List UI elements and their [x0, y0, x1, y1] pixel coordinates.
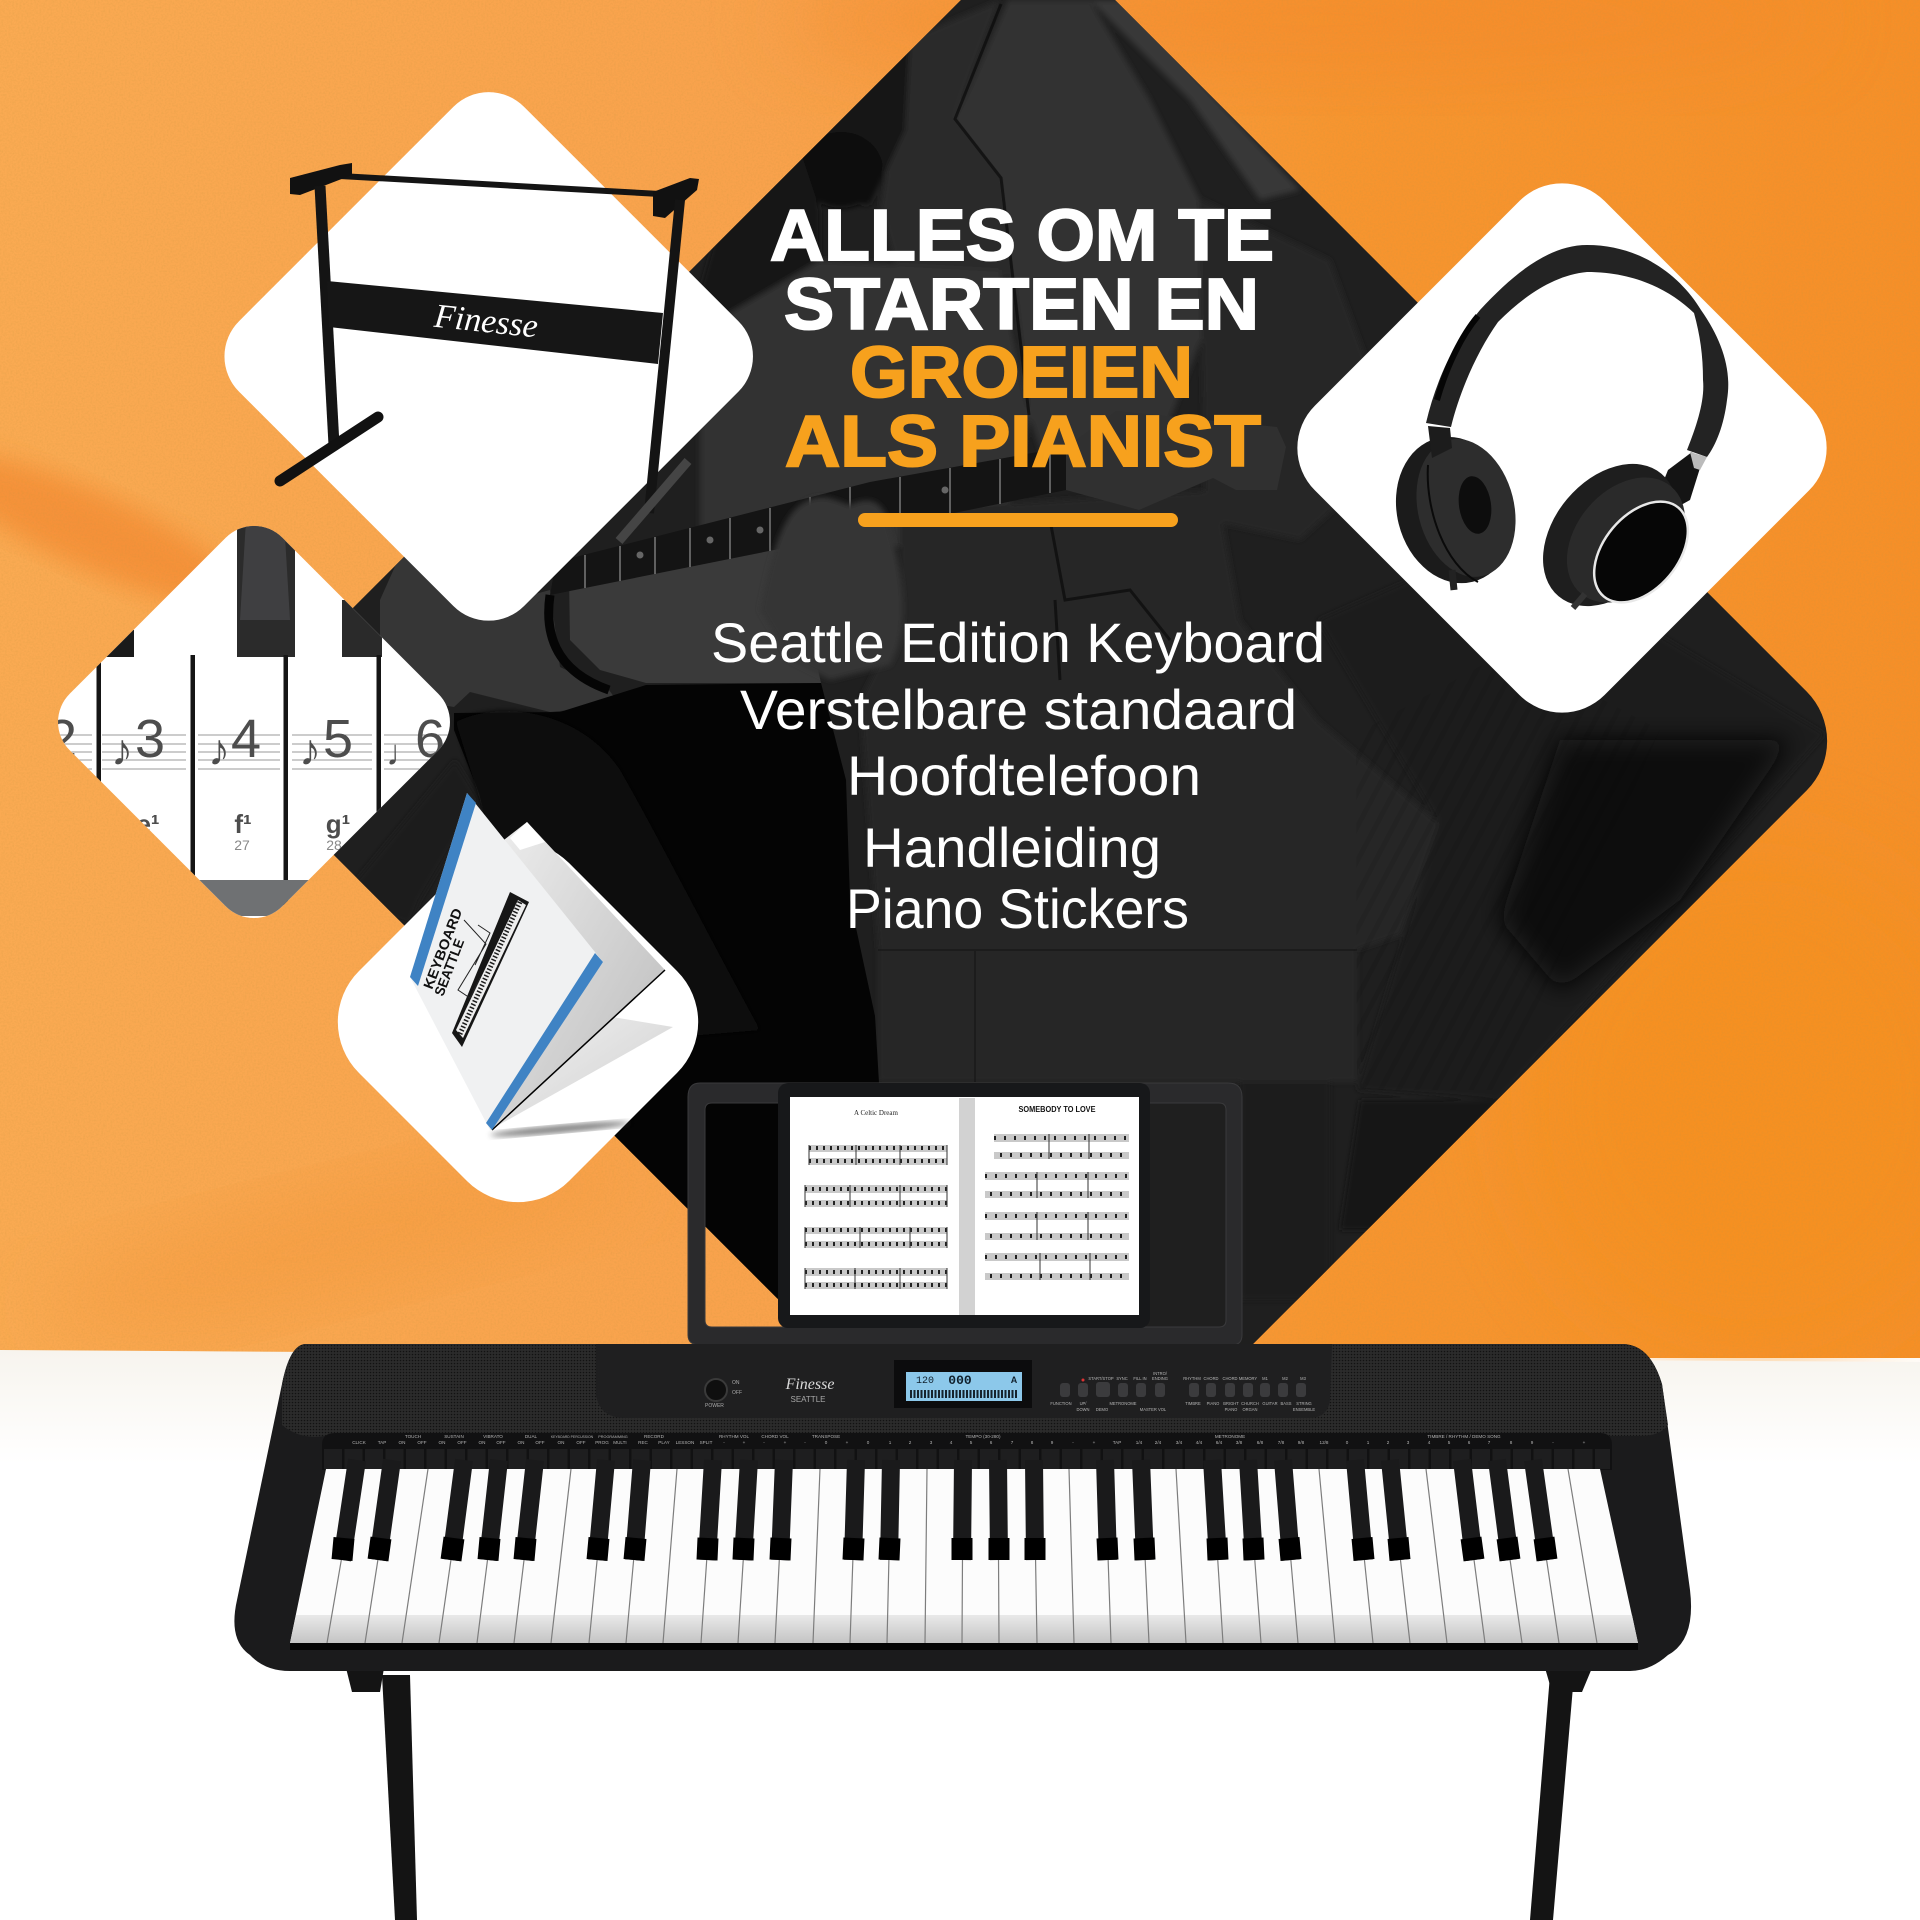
icon: manual booklet: [410, 793, 673, 1139]
rail labels: REC: [638, 1440, 649, 1445]
dark recess on the right: [1500, 740, 1790, 990]
panel button labels: CHORD: [1222, 1376, 1238, 1381]
rail pads: [324, 1449, 1610, 1469]
key numbers and note names: 28: [326, 837, 342, 853]
rail labels: OFF: [457, 1440, 467, 1445]
tablet with sheet music: [778, 1083, 1150, 1328]
panel button labels: FUNCTION: [1050, 1401, 1072, 1406]
title: ALLES OM TE: [770, 196, 1274, 276]
slatted wall: [1356, 650, 1660, 1090]
rail labels: 9: [1051, 1440, 1054, 1445]
rail labels: OFF: [535, 1440, 545, 1445]
key numbers and note names: 2: [47, 709, 77, 769]
rail labels: CHORD VOL: [761, 1434, 789, 1439]
key numbers and note names: ♩: [386, 732, 422, 773]
rail labels: 6/4: [1216, 1440, 1223, 1445]
rail labels: 8: [1510, 1440, 1513, 1445]
keyboard body: [234, 1344, 1691, 1671]
guitarist trousers: [454, 683, 880, 1300]
rail labels: 0: [867, 1440, 870, 1445]
orange wall background: [0, 0, 1920, 1361]
rail labels: 7/8: [1278, 1440, 1285, 1445]
rail labels: 4/4: [1196, 1440, 1203, 1445]
title: [770, 196, 1274, 482]
panel button labels: GUITAR: [1262, 1401, 1278, 1406]
rail labels: METRONOME: [1215, 1434, 1245, 1439]
white diamond: adjustable stand: [204, 71, 774, 641]
shirt below the neck: [569, 545, 821, 683]
rail labels: TAP: [378, 1440, 386, 1445]
manual cover title: KEYBOARD: [420, 906, 465, 991]
key numbers and note names: e¹: [136, 809, 160, 839]
black keys: [342, 1460, 1547, 1560]
rail labels: OFF: [496, 1440, 506, 1445]
keyboard: [234, 1344, 1691, 1671]
rail labels: -: [1552, 1440, 1554, 1445]
panel button labels: CHURCH: [1241, 1401, 1259, 1406]
rail labels: 5: [1448, 1440, 1451, 1445]
panel button labels: INTRO/: [1153, 1371, 1168, 1376]
key bed edge: [290, 1643, 1638, 1650]
list of included items: [711, 611, 1325, 940]
rail labels: TEMPO (30-280): [966, 1434, 1001, 1439]
white floor: [0, 1350, 1920, 1920]
list of included items: Handleiding: [863, 816, 1161, 879]
rail labels: TIMBRE / RHYTHM / DEMO SONG: [1427, 1434, 1501, 1439]
rail labels: 3: [930, 1440, 933, 1445]
rail labels: 1/4: [1136, 1440, 1143, 1445]
pillar seams: [878, 950, 1357, 1082]
rail labels: [352, 1434, 1586, 1445]
panel button labels: PIANO: [1207, 1401, 1219, 1406]
rail labels: RECORD: [644, 1434, 665, 1439]
panel button labels: TIMBRE: [1185, 1401, 1201, 1406]
panel button labels: RHYTHM: [1183, 1376, 1201, 1381]
sheet music page: A Celtic Dream: A Celtic Dream: [854, 1109, 899, 1117]
rail labels: PROGRAMMING: [598, 1435, 628, 1439]
rail labels: CLICK: [352, 1440, 367, 1445]
rail labels: 12/8: [1320, 1440, 1329, 1445]
title: GROEIEN: [850, 333, 1193, 413]
white diamond: manual: [308, 793, 728, 1232]
panel button labels: UP/: [1080, 1401, 1087, 1406]
title underline: [858, 513, 1178, 527]
rail labels: 2/4: [1155, 1440, 1162, 1445]
rail labels: 4: [1428, 1440, 1431, 1445]
rail labels: OFF: [417, 1440, 427, 1445]
key numbers and note names: ♪: [299, 726, 321, 775]
rail labels: 2: [909, 1440, 912, 1445]
white keys: [290, 1469, 1638, 1643]
rail labels: 6: [990, 1440, 993, 1445]
rail labels: ON: [399, 1440, 405, 1445]
rail labels: ON: [558, 1440, 564, 1445]
key numbers and note names: ♪: [111, 726, 133, 775]
black key front tips: [342, 1538, 1547, 1560]
panel button labels: M2: [1282, 1376, 1289, 1381]
rail labels: +: [743, 1440, 746, 1445]
panel button labels: PIANO: [1225, 1407, 1237, 1412]
panel logo: Finesse: [785, 1376, 834, 1393]
rail labels: LESSON: [676, 1440, 694, 1445]
rail labels: KEYBOARD PERCUSSION: [551, 1435, 594, 1439]
rail labels: -: [723, 1440, 725, 1445]
rail labels: TAP: [1113, 1440, 1121, 1445]
title: STARTEN EN: [784, 265, 1259, 345]
panel button labels: FILL IN: [1133, 1376, 1147, 1381]
rail labels: 6/8: [1257, 1440, 1264, 1445]
power knob: ON: [732, 1380, 740, 1386]
rail labels: OFF: [576, 1440, 586, 1445]
list of included items: Hoofdtelefoon: [847, 744, 1201, 807]
LCD display: 000: [948, 1373, 972, 1388]
rail labels: +: [784, 1440, 787, 1445]
keyboard drawing on the cover: [452, 892, 529, 1047]
rail labels: 7: [1488, 1440, 1491, 1445]
list of included items: Seattle Edition Keyboard: [711, 611, 1325, 674]
rock cracks: [955, 4, 1170, 680]
panel button labels: DOWN: [1077, 1407, 1090, 1412]
panel button labels: START/STOP: [1088, 1376, 1114, 1381]
panel buttons: [1060, 1378, 1306, 1397]
key numbers and note names: f¹: [234, 809, 252, 839]
rail labels: 3: [1407, 1440, 1410, 1445]
rail labels: 3/4: [1176, 1440, 1183, 1445]
staff lines: [40, 735, 470, 769]
panel logo: [785, 1376, 834, 1404]
LCD display: A: [1011, 1375, 1018, 1385]
speaker grille: [282, 1344, 1668, 1437]
power knob: POWER: [705, 1403, 724, 1409]
list of included items: Verstelbare standaard: [740, 678, 1297, 741]
rail labels: 0: [1346, 1440, 1349, 1445]
piano key dividers and black keys: [40, 500, 470, 916]
rail labels: MULTI: [613, 1440, 627, 1445]
rail labels: 5: [970, 1440, 973, 1445]
guitar headstock: [1066, 411, 1286, 510]
rail labels: TRANSPOSE: [812, 1434, 840, 1439]
panel button labels: METRONOME: [1109, 1401, 1137, 1406]
key numbers and note names: 27: [234, 837, 250, 853]
key numbers and note names: g¹: [326, 809, 350, 839]
white diamond: stickers close-up: [40, 500, 470, 950]
control panel: [596, 1344, 1332, 1418]
rail labels: 0: [825, 1440, 828, 1445]
panel button labels: MASTER VOL: [1140, 1407, 1167, 1412]
rail labels: 8: [1031, 1440, 1034, 1445]
rail labels: 6: [1468, 1440, 1471, 1445]
panel button labels: MEMORY: [1239, 1376, 1257, 1381]
title: ALS PIANIST: [785, 402, 1261, 482]
manual cover title: SEATTLE: [431, 936, 467, 998]
icon: headphones: [1381, 245, 1728, 632]
rail labels: ON: [518, 1440, 524, 1445]
rail labels: 1: [889, 1440, 892, 1445]
panel button labels: ORGAN: [1242, 1407, 1258, 1412]
guitar neck with frets: [550, 447, 1066, 595]
rail labels: SUSTAIN: [444, 1434, 464, 1439]
rail labels: SPLIT: [700, 1440, 713, 1445]
sheet music page: Somebody to Love: [985, 1105, 1129, 1280]
rail labels: +: [1093, 1440, 1096, 1445]
panel logo: SEATTLE: [791, 1395, 825, 1404]
power knob: [705, 1379, 742, 1409]
guitarist hand: [760, 497, 903, 680]
rail labels: +: [1583, 1440, 1586, 1445]
panel button labels: BRIGHT: [1223, 1401, 1239, 1406]
rail labels: VIBRATO: [483, 1434, 503, 1439]
white diamond: headphones: [1273, 159, 1851, 737]
rail labels: DUAL: [525, 1434, 538, 1439]
panel button labels: ENDING: [1152, 1376, 1168, 1381]
guitar body edge: [549, 595, 609, 690]
rail labels: RHYTHM VOL: [719, 1434, 750, 1439]
black diamond with guitarist photo: [334, 0, 1828, 1344]
rail labels: PROG: [595, 1440, 609, 1445]
panel button labels: BASS: [1281, 1401, 1292, 1406]
rail labels: 3/8: [1236, 1440, 1243, 1445]
icon: keyboard stand: [280, 163, 699, 541]
panel button labels: CHORD: [1203, 1376, 1219, 1381]
rail labels: ON: [479, 1440, 485, 1445]
rail labels: 4: [950, 1440, 953, 1445]
key numbers and note names: 3: [135, 709, 165, 769]
LCD display: [894, 1360, 1032, 1408]
power knob: OFF: [732, 1390, 742, 1396]
rail labels: -: [804, 1440, 806, 1445]
key numbers and note names: 5: [323, 709, 353, 769]
key numbers and note names: 4: [231, 709, 261, 769]
music stand frame: [688, 1083, 1242, 1350]
panel button labels: M3: [1300, 1376, 1307, 1381]
panel button labels: M1: [1262, 1376, 1269, 1381]
key numbers and note names: 6: [415, 709, 445, 769]
key numbers and note names: ♪: [208, 726, 230, 775]
sheet music page: Somebody to Love: SOMEBODY TO LOVE: [1018, 1105, 1096, 1114]
icon: keyboard stand: Finesse: [432, 298, 540, 345]
rail labels: ON: [439, 1440, 445, 1445]
rail labels: 9/8: [1298, 1440, 1305, 1445]
trouser knee highlight: [456, 711, 760, 1040]
rail labels: -: [763, 1440, 765, 1445]
rail labels: -: [1072, 1440, 1074, 1445]
panel button labels: SYNC: [1116, 1376, 1128, 1381]
rail labels: 2: [1387, 1440, 1390, 1445]
rail labels: 7: [1011, 1440, 1014, 1445]
list of included items: Piano Stickers: [846, 877, 1189, 940]
LCD display: 120: [916, 1376, 934, 1387]
key numbers and note names: [47, 709, 445, 853]
panel button labels: DEMO: [1096, 1407, 1108, 1412]
keyboard stand legs: [346, 1668, 1592, 1920]
rail labels: PLAY: [658, 1440, 670, 1445]
rail labels: TOUCH: [405, 1434, 421, 1439]
button rail: [322, 1433, 1612, 1470]
rail labels: 9: [1531, 1440, 1534, 1445]
panel button labels: [1050, 1371, 1315, 1412]
rail labels: +: [846, 1440, 849, 1445]
sheet music page: A Celtic Dream: [805, 1109, 947, 1289]
rail labels: 1: [1367, 1440, 1370, 1445]
panel button labels: STRING: [1296, 1401, 1312, 1406]
guitar body: [380, 553, 620, 712]
panel button labels: ENSEMBLE: [1293, 1407, 1315, 1412]
